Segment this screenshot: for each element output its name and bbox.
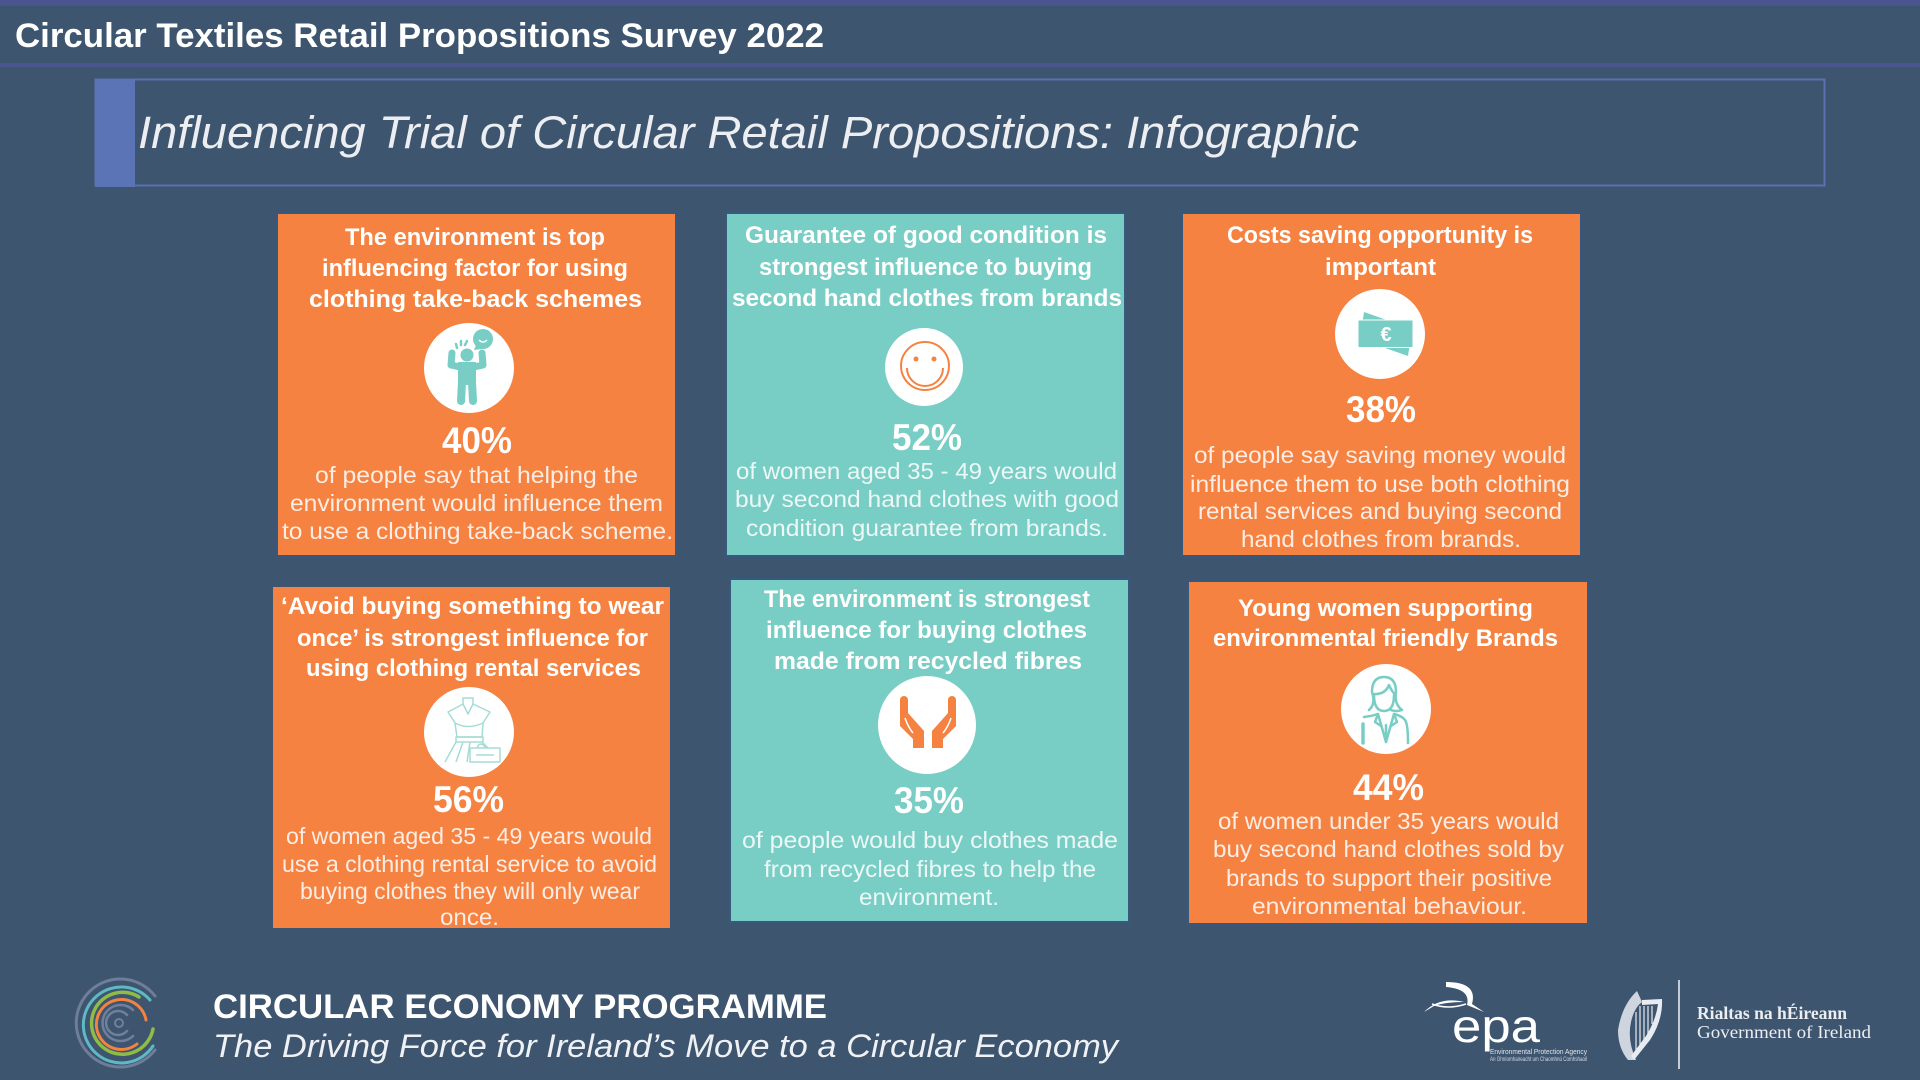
heading xyxy=(281,593,664,682)
description: brands to support their positive xyxy=(1226,865,1552,891)
icon: dress and handbag xyxy=(424,687,514,777)
subtitle text: Influencing Trial of Circular Retail Propositions: Infographic xyxy=(138,107,1359,158)
heading: strongest influence to buying xyxy=(759,254,1092,281)
description: to use a clothing take-back scheme. xyxy=(282,518,673,544)
header title: Circular Textiles Retail Propositions Survey 2022 xyxy=(15,17,824,55)
heading: influencing factor for using xyxy=(322,255,628,282)
panel: clothing rental services xyxy=(273,587,670,930)
description: environment. xyxy=(859,884,999,910)
panel: clothing take-back schemes xyxy=(276,212,677,557)
icon: circular economy logo xyxy=(76,979,155,1067)
heading: second hand clothes from brands xyxy=(732,285,1122,312)
description xyxy=(282,823,657,930)
description: buy second hand clothes with good xyxy=(735,486,1119,512)
description: of women aged 35 - 49 years would xyxy=(736,458,1117,484)
heading: clothing take-back schemes xyxy=(309,286,642,313)
statistic: 35% xyxy=(894,780,964,821)
panel: costs saving opportunity xyxy=(1181,212,1582,557)
programme title: CIRCULAR ECONOMY PROGRAMME xyxy=(213,988,827,1026)
description: from recycled fibres to help the xyxy=(764,856,1096,882)
description xyxy=(742,827,1118,910)
heading: Guarantee of good condition is xyxy=(745,222,1107,249)
government wordmark: Rialtas na hÉireann xyxy=(1697,1002,1847,1023)
description xyxy=(1190,442,1570,552)
description: environment would influence them xyxy=(290,490,663,516)
description: hand clothes from brands. xyxy=(1241,526,1521,552)
heading: using clothing rental services xyxy=(306,655,641,682)
logo: harp emblem xyxy=(1618,991,1662,1060)
description: rental services and buying second xyxy=(1198,498,1562,524)
heading: made from recycled fibres xyxy=(774,648,1082,675)
heading: Costs saving opportunity is xyxy=(1227,222,1533,249)
government wordmark xyxy=(1697,1002,1871,1042)
description: of people say saving money would xyxy=(1194,442,1566,468)
heading xyxy=(732,222,1122,312)
logo: EPA xyxy=(1424,982,1587,1063)
heading: once’ is strongest influence for xyxy=(297,625,648,652)
programme tagline: The Driving Force for Ireland’s Move to a Circular Economy xyxy=(213,1028,1120,1064)
description xyxy=(735,458,1119,541)
description: once. xyxy=(440,904,499,930)
heading xyxy=(1213,595,1558,652)
description: of people would buy clothes made xyxy=(742,827,1118,853)
icon: person with speech bubble xyxy=(424,323,514,413)
description: buying clothes they will only wear xyxy=(300,878,640,904)
statistic: 44% xyxy=(1353,767,1424,808)
description: environmental behaviour. xyxy=(1252,893,1527,919)
logo: EPA: epa xyxy=(1452,1000,1540,1052)
subtitle banner xyxy=(95,79,1824,187)
description xyxy=(1213,808,1565,919)
top header band xyxy=(0,0,1920,67)
icon: smiley face xyxy=(885,328,963,406)
heading: The environment is strongest xyxy=(764,586,1090,613)
description: use a clothing rental service to avoid xyxy=(282,851,657,877)
description: of women under 35 years would xyxy=(1218,808,1559,834)
statistic: 52% xyxy=(892,417,962,458)
description: of people say that helping the xyxy=(315,462,638,488)
panel: young women and brands xyxy=(1187,580,1589,925)
heading: Young women supporting xyxy=(1238,595,1533,622)
icon: euro banknotes: € xyxy=(1380,324,1392,346)
icon: woman in suit xyxy=(1341,664,1431,754)
description: of women aged 35 - 49 years would xyxy=(286,823,652,849)
description: influence them to use both clothing xyxy=(1190,471,1570,497)
heading: influence for buying clothes xyxy=(766,617,1087,644)
panel: second hand clothes guarantee xyxy=(725,212,1126,557)
divider xyxy=(1678,980,1680,1069)
statistic: 40% xyxy=(442,420,512,461)
heading xyxy=(1227,222,1533,281)
statistic: 56% xyxy=(433,779,504,820)
heading: environmental friendly Brands xyxy=(1213,625,1558,652)
description: condition guarantee from brands. xyxy=(746,515,1108,541)
description xyxy=(282,462,673,544)
heading: important xyxy=(1325,254,1436,281)
government wordmark: Government of Ireland xyxy=(1697,1022,1871,1042)
heading xyxy=(764,586,1090,675)
heading: ‘Avoid buying something to wear xyxy=(281,593,664,620)
icon: open hands xyxy=(878,676,976,774)
logo: EPA: An Ghníomhaireacht um Chaomhnú Comhshaoil xyxy=(1490,1057,1587,1063)
description: buy second hand clothes sold by xyxy=(1213,836,1565,862)
icon: euro banknotes xyxy=(1335,289,1425,379)
logo: EPA: Environmental Protection Agency xyxy=(1490,1049,1587,1056)
panel: recycled fibres xyxy=(729,578,1130,923)
heading: The environment is top xyxy=(345,224,605,251)
statistic: 38% xyxy=(1346,389,1416,430)
heading xyxy=(309,224,642,313)
